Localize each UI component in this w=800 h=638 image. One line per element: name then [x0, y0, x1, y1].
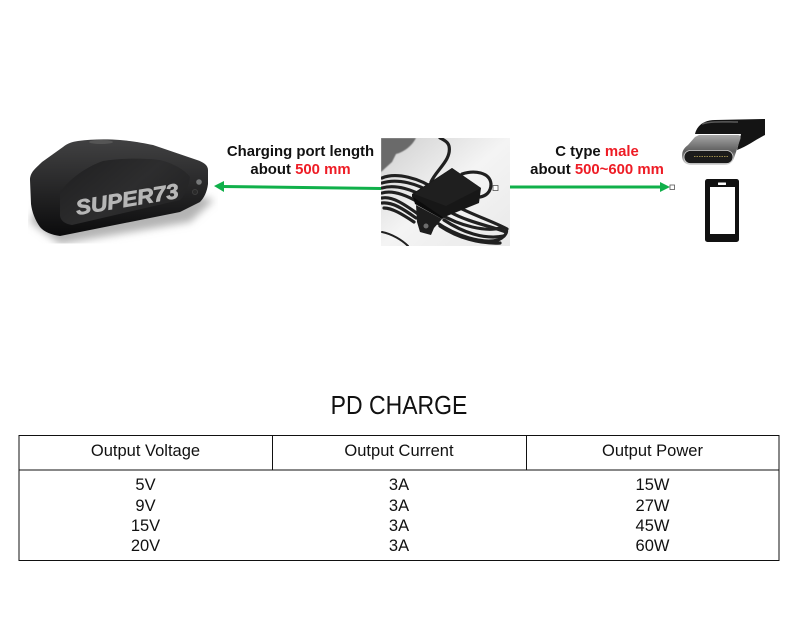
column: output power: 15W	[636, 476, 670, 494]
column: output voltage: 9V	[135, 497, 156, 515]
column: output current: 3A	[389, 497, 409, 515]
right label: C type male	[530, 144, 664, 178]
column: output current: 3A	[389, 537, 409, 555]
left label: charging port length: Charging port length	[227, 144, 374, 160]
right label: C type male: about 500~600 mm	[530, 162, 664, 178]
icon: smartphone	[705, 179, 739, 242]
left label: charging port length	[227, 144, 374, 178]
title: PD CHARGE	[331, 392, 467, 420]
left green arrow	[214, 181, 381, 192]
right green arrow	[510, 182, 674, 192]
column: output current: 3A	[389, 476, 409, 494]
column: output power: Output Power	[602, 442, 703, 460]
icon: USB-C connector	[682, 119, 765, 165]
column: output power	[602, 442, 703, 555]
column: output current	[344, 442, 454, 555]
battery port	[196, 179, 202, 185]
column: output voltage: 5V	[135, 476, 156, 494]
column: output voltage: Output Voltage	[91, 442, 200, 460]
cable photo	[381, 138, 510, 246]
battery side panel	[60, 158, 170, 225]
left label: charging port length: about 500 mm	[250, 162, 351, 178]
column: output power: 60W	[636, 537, 670, 555]
column: output current: Output Current	[344, 442, 454, 460]
column: output power: 27W	[636, 497, 670, 515]
small handle square	[493, 186, 498, 190]
column: output voltage: 15V	[131, 517, 160, 535]
right label: C type male: C type male	[555, 144, 639, 160]
battery logo: SUPER73	[74, 180, 181, 220]
column: output power: 45W	[636, 517, 670, 535]
table: PD charge	[19, 436, 779, 560]
battery image	[30, 139, 214, 244]
column: output voltage	[91, 442, 200, 555]
junction box	[412, 168, 481, 218]
column: output current: 3A	[389, 517, 409, 535]
column: output voltage: 20V	[131, 537, 160, 555]
